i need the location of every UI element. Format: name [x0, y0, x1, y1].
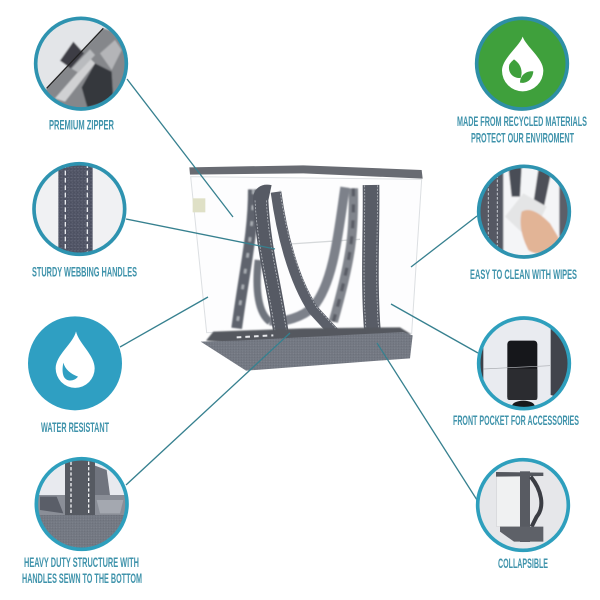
zipper: [189, 165, 423, 179]
icon: phone in pocket photo: [477, 315, 573, 412]
front pocket edge: [290, 239, 360, 244]
label: STURDY WEBBING HANDLES: [32, 264, 137, 280]
label: HEAVY DUTY STRUCTURE WITH: [24, 554, 139, 570]
label line 2: HANDLES SEWN TO THE BOTTOM: [22, 570, 142, 586]
panel: easy to clean: [470, 163, 577, 282]
panel: recycled materials: [457, 18, 587, 145]
panel: collapsible: [475, 457, 572, 571]
back handles: [237, 187, 353, 328]
panel: water resistant: [28, 316, 122, 435]
icon: hand wiping bag photo: [477, 163, 573, 260]
label: COLLAPSIBLE: [498, 555, 548, 571]
panel: front pocket: [453, 315, 579, 428]
icon: zipper photo: [34, 16, 128, 111]
panel: premium zipper: [34, 16, 128, 130]
panel: heavy duty structure: [22, 457, 142, 586]
icon: folded bag photo: [475, 457, 572, 553]
label: WATER RESISTANT: [41, 419, 109, 435]
panel: sturdy webbing handles: [30, 160, 137, 280]
front handles: [255, 185, 379, 337]
floor highlights: [237, 335, 273, 337]
callout lines: [120, 79, 478, 500]
bag inner floor: [206, 327, 411, 347]
icon: handle stitched to base photo: [33, 457, 133, 553]
bag: [189, 165, 423, 371]
size tag: [193, 198, 205, 212]
woven base: [201, 332, 413, 371]
icon: webbing strap photo: [32, 162, 126, 256]
icon: water drop: [28, 316, 122, 410]
label: PREMIUM ZIPPER: [49, 116, 114, 132]
icon: green drop with leaves: [477, 18, 567, 109]
clear bag body: [191, 177, 422, 333]
